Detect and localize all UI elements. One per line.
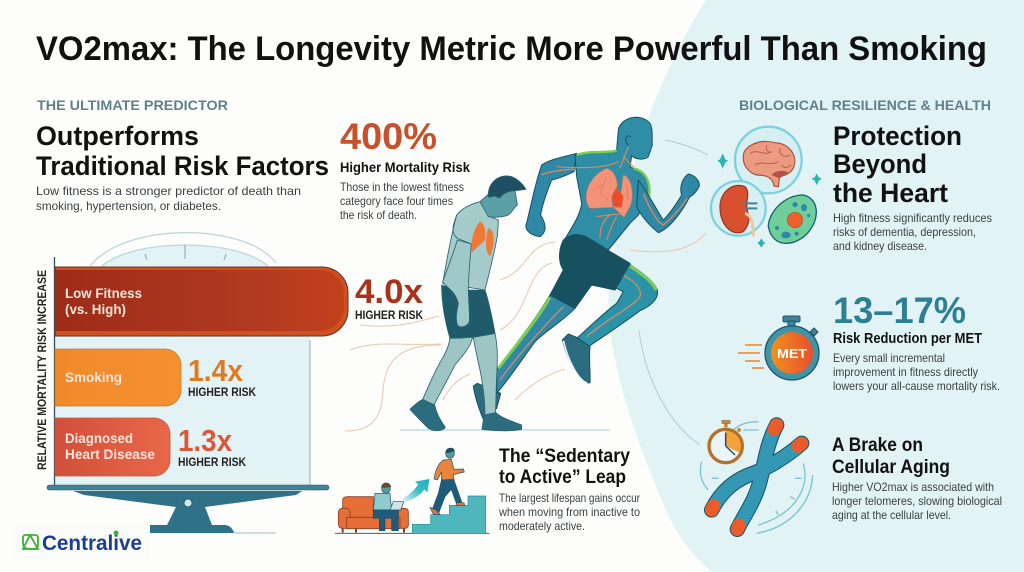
bar: smoking bbox=[55, 349, 256, 406]
heading: a brake on cellular aging bbox=[832, 434, 950, 478]
text: sedentary to active description: when moving from inactive to bbox=[498, 505, 640, 519]
stat: 13-17 percent risk reduction per MET: lowers your all-cause mortality risk. bbox=[833, 379, 1000, 393]
intro text: Low fitness is a stronger predictor of death than bbox=[36, 184, 301, 198]
icon: MET stopwatch: MET bbox=[777, 346, 807, 361]
arrow bbox=[402, 479, 429, 502]
person on sofa bbox=[373, 483, 404, 531]
heading: outperforms traditional risk factors: Traditional Risk Factors bbox=[36, 151, 329, 181]
lungs and heart bbox=[586, 168, 632, 217]
stat: 13-17 percent risk reduction per MET: 13–17% bbox=[833, 290, 966, 331]
stat: 400% higher mortality risk: 400% bbox=[340, 116, 437, 157]
bar: smoking: HIGHER RISK bbox=[188, 385, 256, 399]
rear foot bbox=[473, 383, 501, 419]
bar: diagnosed heart disease bbox=[55, 418, 246, 476]
scale base bbox=[47, 485, 329, 533]
intro text: smoking, hypertension, or diabetes. bbox=[36, 199, 221, 213]
background teal panel bbox=[608, 0, 1024, 572]
man arm bbox=[443, 240, 471, 327]
text: protection description bbox=[833, 211, 992, 253]
logo: centralive: Centralive bbox=[42, 532, 142, 555]
text: protection description: and kidney disease. bbox=[833, 239, 927, 253]
clock bbox=[722, 421, 730, 423]
heading: outperforms traditional risk factors: Outperforms bbox=[36, 121, 199, 151]
bar: diagnosed heart disease: HIGHER RISK bbox=[178, 455, 246, 469]
heading: protection beyond the heart: the Heart bbox=[833, 178, 948, 208]
heading: a brake on cellular aging: A Brake on bbox=[832, 434, 923, 456]
heading: a brake on cellular aging: Cellular Aging bbox=[832, 456, 950, 478]
ground line bbox=[400, 429, 610, 431]
logo mark bbox=[23, 535, 38, 549]
bar: diagnosed heart disease: Heart Disease bbox=[65, 447, 155, 462]
heading: outperforms traditional risk factors bbox=[36, 121, 329, 181]
title: VO2max: The Longevity Metric More Powerful Than Smoking bbox=[36, 30, 987, 68]
torso and head bbox=[563, 117, 652, 250]
rear arm bbox=[526, 153, 577, 237]
stat: 13-17 percent risk reduction per MET: improvement in fitness directly bbox=[833, 365, 978, 379]
icon: sedentary to active scene bbox=[335, 448, 489, 533]
icon: MET stopwatch bbox=[738, 316, 819, 380]
front leg bbox=[577, 264, 658, 347]
text: sedentary to active description: moderately active. bbox=[499, 519, 585, 533]
section label: biological resilience and health: BIOLOGICAL RESILIENCE & HEALTH bbox=[739, 97, 991, 113]
stat: 13-17 percent risk reduction per MET bbox=[833, 290, 1000, 393]
text: cellular aging description bbox=[832, 480, 1002, 522]
rear leg bbox=[497, 295, 575, 393]
section label: the ultimate predictor: THE ULTIMATE PREDICTOR bbox=[37, 97, 228, 113]
gauge dial bbox=[90, 233, 276, 266]
stat: 400% higher mortality risk: category face four times bbox=[340, 194, 453, 208]
stat: 400% higher mortality risk: Higher Mortality Risk bbox=[340, 159, 470, 175]
intro text bbox=[36, 184, 301, 213]
stat: 400% higher mortality risk: the risk of death. bbox=[340, 208, 417, 222]
text: cellular aging description: longer telomeres, slowing biological bbox=[832, 494, 1002, 508]
heading: protection beyond the heart bbox=[833, 121, 962, 208]
man hair bbox=[488, 176, 526, 198]
bar: low fitness: Low Fitness bbox=[65, 286, 142, 301]
man torso bbox=[443, 202, 498, 290]
stat: 400% higher mortality risk: Those in the lowest fitness bbox=[340, 180, 464, 194]
climbing person bbox=[430, 448, 465, 514]
bar: diagnosed heart disease: 1.3x bbox=[178, 423, 233, 458]
heading: the sedentary to active leap bbox=[499, 446, 630, 488]
bar: smoking: Smoking bbox=[65, 370, 122, 385]
text: cellular aging description: Higher VO2max is associated with bbox=[832, 480, 994, 494]
figure: runner bbox=[473, 117, 699, 419]
axis label: RELATIVE MORTALITY RISK INCREASE bbox=[35, 270, 49, 470]
text: cellular aging description: aging at the cellular level. bbox=[832, 508, 951, 522]
stat: 13-17 percent risk reduction per MET: Every small incremental bbox=[833, 351, 945, 365]
logo: centralive bbox=[15, 524, 150, 560]
text: protection description: risks of dementia, depression, bbox=[833, 225, 976, 239]
front foot bbox=[562, 334, 590, 383]
man lungs bbox=[471, 222, 485, 253]
heading: the sedentary to active leap: to Active” Leap bbox=[499, 467, 626, 488]
bar: low fitness: 4.0x bbox=[355, 273, 423, 311]
text: sedentary to active description: The largest lifespan gains occur bbox=[499, 491, 640, 505]
chart panel bbox=[55, 330, 310, 485]
stat: 13-17 percent risk reduction per MET: Risk Reduction per MET bbox=[833, 331, 982, 347]
bar chart: relative mortality risk on a scale bbox=[35, 233, 423, 533]
stairs bbox=[412, 496, 486, 533]
shorts bbox=[550, 235, 630, 308]
bar: diagnosed heart disease: Diagnosed bbox=[65, 431, 133, 446]
heading: protection beyond the heart: Protection bbox=[833, 121, 962, 151]
icon: brain, kidney and cell bbox=[711, 127, 822, 248]
man shoes bbox=[410, 399, 445, 431]
text: sedentary to active description bbox=[498, 491, 640, 533]
stat: 400% higher mortality risk bbox=[340, 116, 470, 222]
heading: protection beyond the heart: Beyond bbox=[833, 149, 927, 179]
bar: smoking: 1.4x bbox=[188, 353, 244, 388]
icon: chromosome and clock bbox=[700, 421, 813, 533]
man head bbox=[480, 188, 517, 217]
front arm bbox=[637, 174, 699, 233]
text: protection description: High fitness significantly reduces bbox=[833, 211, 992, 225]
chromosome arms bbox=[737, 425, 777, 529]
man legs bbox=[422, 337, 473, 406]
bar: low fitness: HIGHER RISK bbox=[355, 308, 423, 322]
bar: low fitness bbox=[55, 267, 423, 336]
heading: the sedentary to active leap: The “Sedentary bbox=[499, 446, 630, 467]
bar: low fitness: (vs. High) bbox=[65, 302, 126, 317]
sofa bbox=[338, 497, 408, 533]
man shorts bbox=[442, 285, 495, 338]
veins bbox=[557, 147, 633, 240]
motion lines bbox=[345, 140, 708, 445]
figure: sedentary man bbox=[410, 176, 526, 431]
